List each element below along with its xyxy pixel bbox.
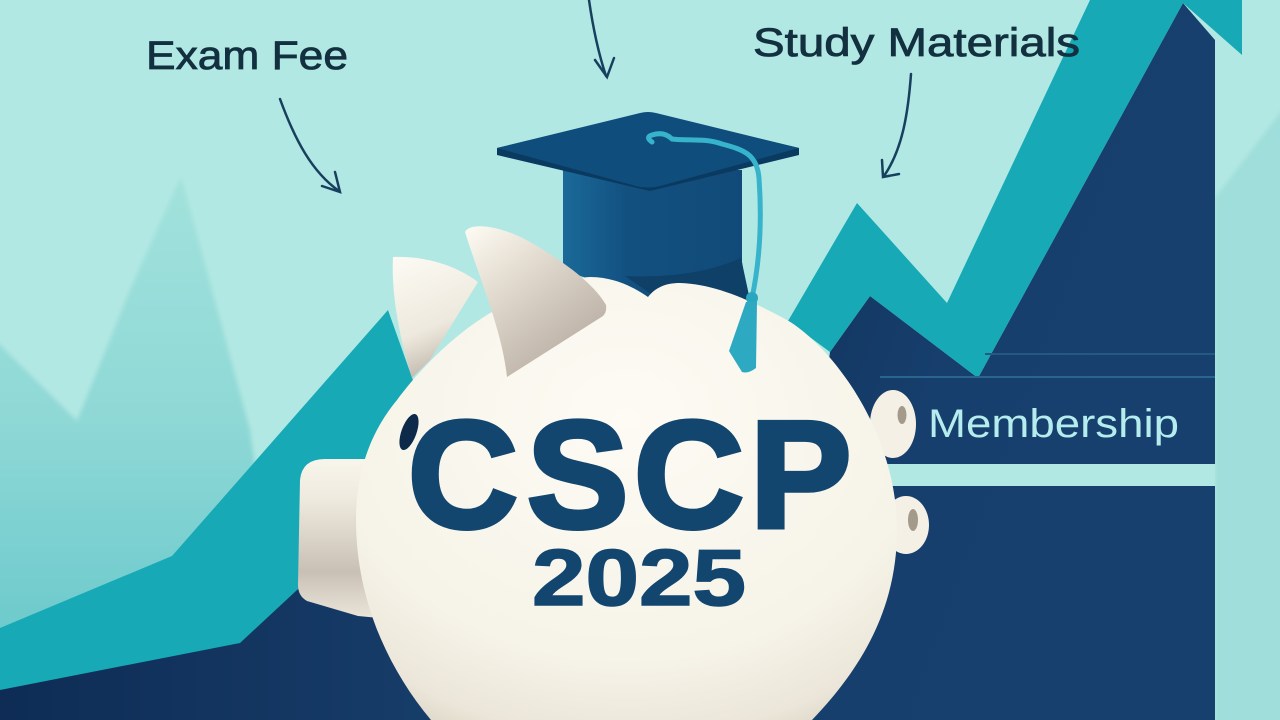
label: Membership: Membership (928, 402, 1179, 446)
side knob lower (883, 496, 929, 554)
arrow: from Study Materials (882, 74, 911, 177)
membership band (880, 353, 1215, 486)
navy area right (780, 3, 1215, 720)
headline (395, 390, 851, 622)
piggy bank (298, 226, 929, 720)
arrow: top centre (589, 0, 614, 77)
navy area left (0, 510, 500, 720)
label: Exam Fee: Exam Fee (146, 34, 348, 78)
headline 2025: 2025 (532, 533, 746, 622)
knob hole upper (898, 406, 906, 424)
label: Study Materials: Study Materials (753, 21, 1080, 65)
front ear (465, 226, 606, 377)
snout (298, 459, 400, 620)
pig body (356, 277, 897, 720)
arrow: from Exam Fee (280, 99, 340, 192)
side knob upper (870, 390, 916, 458)
tassel (648, 134, 760, 372)
rising teal trend area left (0, 310, 420, 720)
headline CSCP: CSCP (408, 390, 851, 560)
knob hole lower (908, 509, 918, 531)
teal rising arrow right (788, 0, 1242, 378)
graduation cap (497, 112, 799, 300)
eye / apostrophe (395, 412, 423, 452)
back ear (393, 257, 478, 378)
